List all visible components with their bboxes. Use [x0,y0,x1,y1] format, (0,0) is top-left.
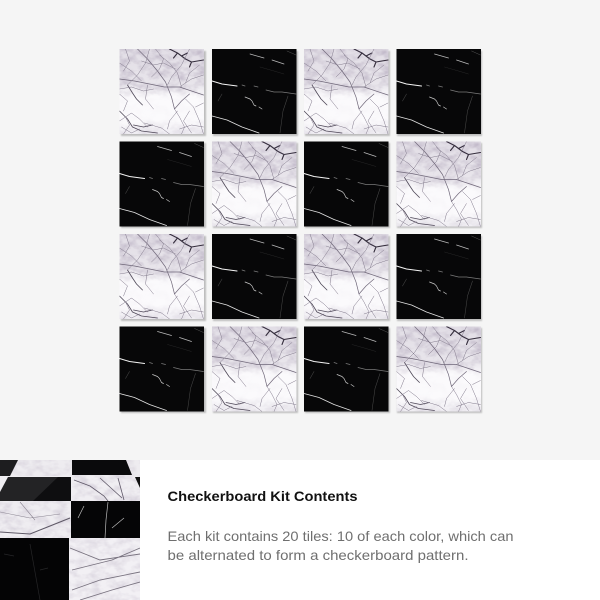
body text: Each kit contains 20 tiles: 10 of each color, which can [168,528,514,544]
black marble tile, row 1 column 4 [396,49,482,134]
light marble tile, row 3 column 3 [304,234,389,319]
light marble tile, row 4 column 4 [396,326,482,412]
light marble tile, row 1 column 3 [304,49,389,134]
body text [168,528,514,563]
light marble tile, row 4 column 2 [212,326,297,412]
installed checkerboard photo [0,460,140,600]
black marble tile, row 2 column 1 [120,142,204,226]
bottom white panel [0,460,600,600]
photo: top row [0,460,140,476]
black marble tile, row 2 column 3 [304,142,389,226]
light marble tile, row 1 column 1 [120,49,204,134]
black marble tile, row 4 column 3 [304,326,389,412]
body text: be alternated to form a checkerboard pattern. [168,547,468,563]
black marble tile, row 3 column 4 [396,234,482,319]
light marble tile, row 2 column 4 [396,142,482,226]
light marble tile, row 3 column 1 [120,234,204,319]
light marble tile, row 2 column 2 [212,142,297,226]
black marble tile, row 1 column 2 [212,49,297,134]
photo: bottom row [0,538,140,600]
photo: second row [0,476,140,501]
tile shadows [121,51,482,413]
tile grid: 4 by 4 checkerboard [120,49,482,413]
black marble tile, row 3 column 2 [212,234,297,319]
black marble tile, row 4 column 1 [120,326,204,412]
photo: third row [0,501,140,538]
heading: Checkerboard Kit Contents [168,488,358,504]
